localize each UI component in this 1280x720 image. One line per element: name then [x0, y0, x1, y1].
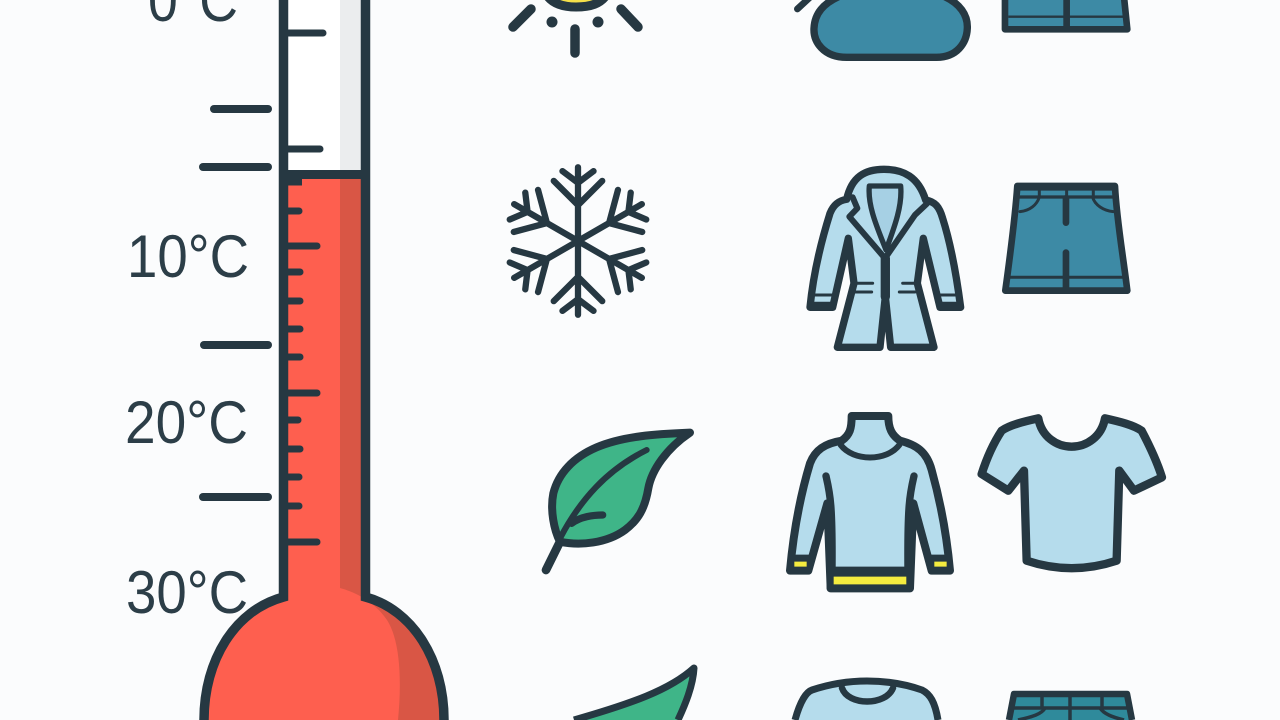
mercury column and bulb	[204, 178, 444, 720]
outer scale ticks	[203, 109, 268, 497]
coat lapels	[849, 197, 927, 258]
icon: bottom sweater	[795, 681, 938, 720]
coat collar lining	[869, 186, 901, 250]
icon: bottom shorts	[1009, 694, 1132, 720]
sweater hem	[830, 570, 910, 589]
coat body	[810, 169, 961, 347]
icon: long coat	[810, 169, 961, 347]
thermometer tube upper glass	[288, 0, 361, 173]
label 20°C: 20°C	[125, 389, 248, 456]
icon: sweater	[790, 416, 950, 589]
sweater cuffs	[790, 557, 950, 572]
icon: second leaf	[574, 668, 694, 720]
icon: dark shorts	[1005, 186, 1127, 291]
icon: sun	[513, 0, 638, 53]
icon: teal hat	[797, 0, 967, 57]
temperature labels	[125, 0, 249, 626]
icon: top shorts	[1005, 0, 1127, 29]
thermometer	[203, 0, 444, 720]
label 30°C: 30°C	[126, 559, 248, 626]
label 10°C: 10°C	[127, 223, 249, 290]
icon: snowflake	[502, 167, 654, 315]
thermometer outline	[204, 0, 444, 720]
icon: leaf	[546, 433, 690, 570]
icon: t-shirt	[982, 418, 1162, 568]
coat cuffs	[812, 295, 959, 303]
coat front seam and pockets	[871, 258, 899, 297]
inner scale ticks	[288, 33, 323, 542]
